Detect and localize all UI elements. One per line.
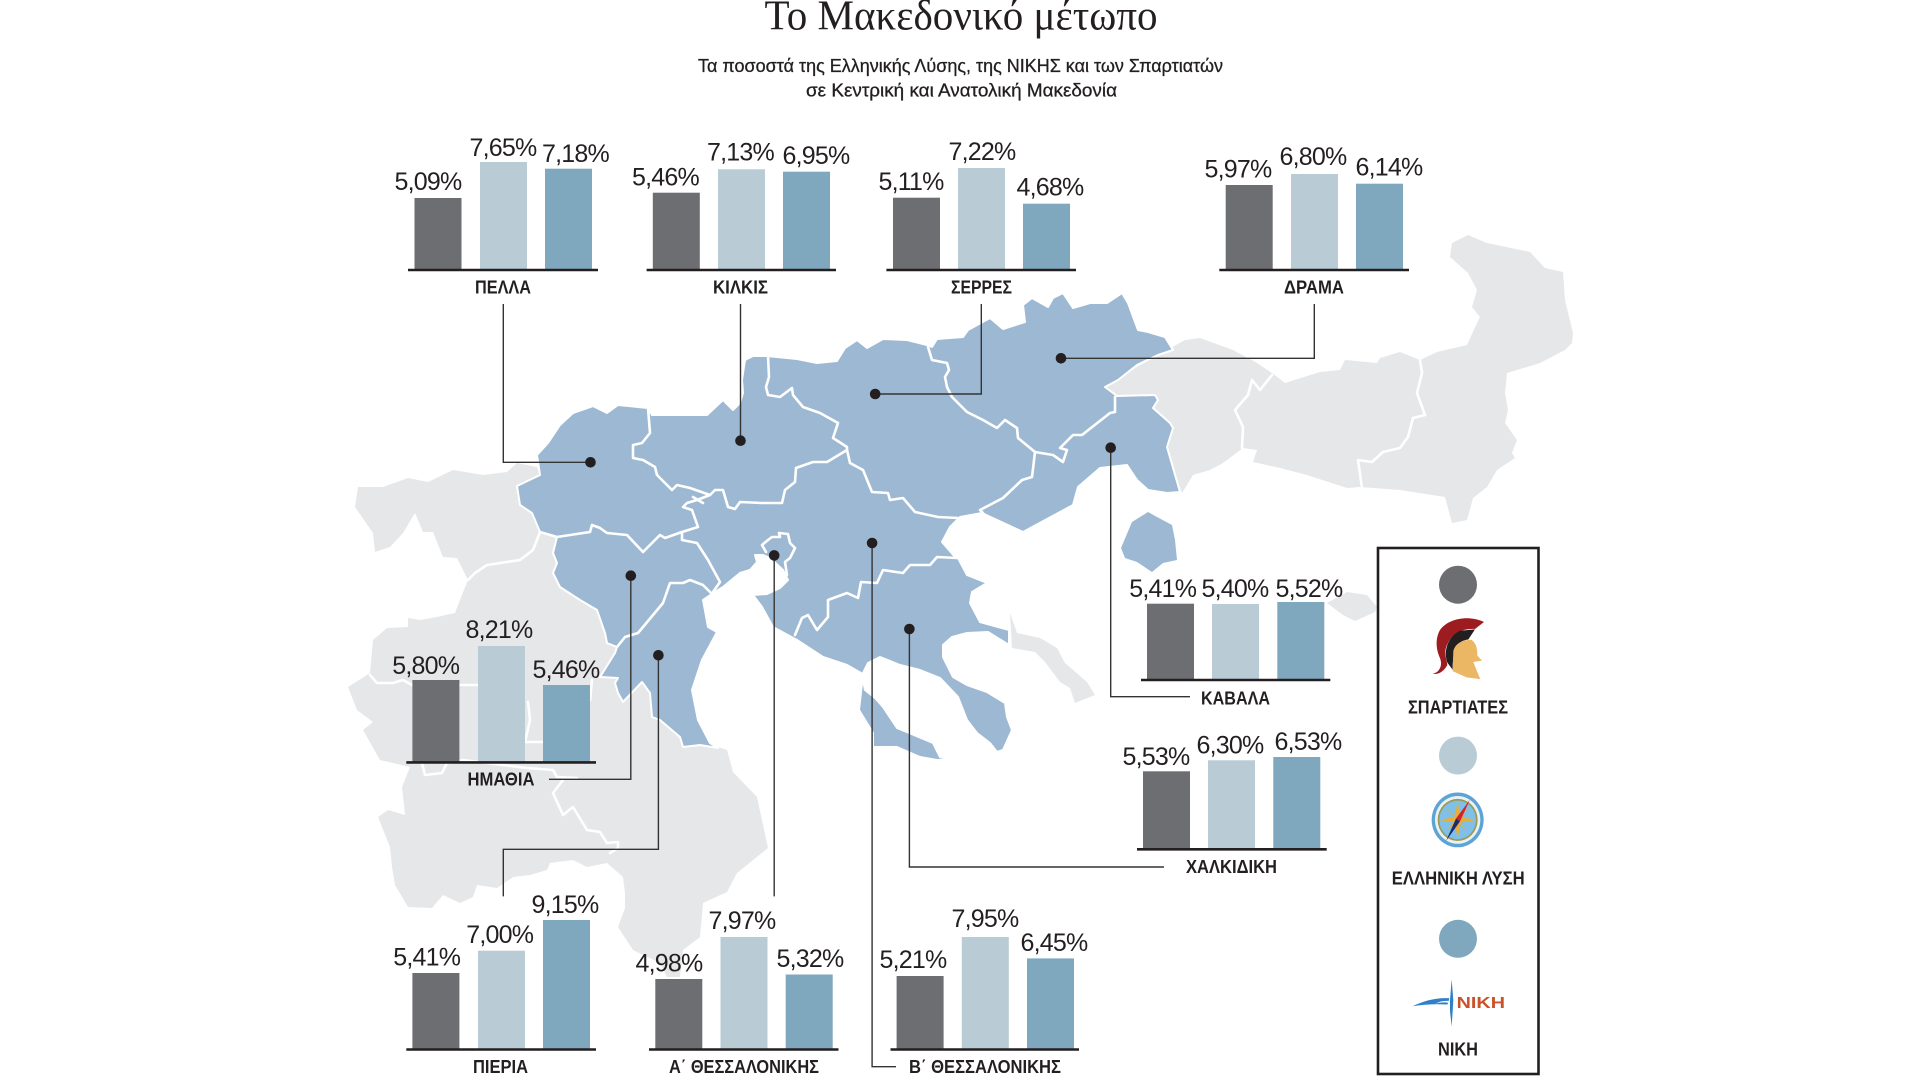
bar chart: Imathia: 5,46% (533, 656, 600, 684)
bar chart: Serres: 4,68% (1017, 174, 1084, 202)
icon: Niki logo (1413, 979, 1505, 1027)
bar chart: A Thessaloniki: Α΄ ΘΕΣΣΑΛΟΝΙΚΗΣ (669, 1057, 819, 1077)
bar chart: Kilkis: 7,13% (707, 138, 775, 166)
subtitle (698, 56, 1223, 100)
connector: Pella (503, 304, 596, 468)
legend swatch: Niki (1439, 920, 1477, 958)
map: regional unit borders (540, 347, 1115, 647)
subtitle: Τα ποσοστά της Ελληνικής Λύσης, της ΝΙΚΗΣ και των Σπαρτιατών (698, 56, 1223, 76)
bar chart: Drama (1205, 143, 1423, 298)
bar chart: Serres: 7,22% (949, 138, 1016, 166)
legend swatch: Spartans (1439, 566, 1477, 604)
bar chart: B Thessaloniki: 7,95% (952, 905, 1019, 933)
bar chart: Kilkis (632, 138, 850, 298)
bar chart: Kavala: 5,40% (1202, 575, 1269, 603)
legend (1378, 548, 1538, 1074)
bar chart: Kavala: 5,52% (1276, 575, 1343, 603)
bar chart: Drama: 6,14% (1356, 154, 1423, 182)
bar chart: Kavala (1129, 575, 1343, 708)
bar chart: Drama: 6,80% (1280, 143, 1347, 171)
bar chart: A Thessaloniki (636, 907, 844, 1077)
connector: Pieria (503, 650, 664, 896)
bar chart: Pieria: ΠΙΕΡΙΑ (473, 1057, 528, 1077)
icon: Spartan helmet (1433, 618, 1484, 679)
bar chart: A Thessaloniki: 4,98% (636, 950, 703, 978)
bar chart: Serres: ΣΕΡΡΕΣ (951, 278, 1012, 298)
bar chart: Pieria: 7,00% (466, 921, 534, 949)
connector: Kilkis (735, 304, 746, 446)
legend label: Spartans: ΣΠΑΡΤΙΑΤΕΣ (1408, 698, 1508, 718)
legend label: Niki: ΝΙΚΗ (1438, 1040, 1478, 1060)
connector: Imathia (549, 570, 636, 779)
bar chart: B Thessaloniki: Β΄ ΘΕΣΣΑΛΟΝΙΚΗΣ (909, 1057, 1061, 1077)
connector: Halkidiki (904, 624, 1164, 867)
bar chart: Pieria: 5,41% (393, 944, 461, 972)
bar chart: Pieria (393, 891, 599, 1077)
bar chart: Pella: ΠΕΛΛΑ (475, 278, 531, 298)
bar chart: Pieria: 9,15% (532, 891, 599, 919)
bar chart: Serres (878, 138, 1084, 298)
bar chart: Halkidiki: ΧΑΛΚΙΔΙΚΗ (1186, 857, 1277, 877)
bar chart: B Thessaloniki: 5,21% (880, 946, 947, 974)
connector: Serres (870, 304, 981, 399)
bar chart: Drama: 5,97% (1205, 156, 1272, 184)
bar chart: Halkidiki: 6,53% (1275, 728, 1342, 756)
map: neighbouring regions in grey (348, 235, 1573, 977)
bar chart: Kilkis: 5,46% (632, 164, 700, 192)
bar chart: Kavala: ΚΑΒΑΛΑ (1201, 688, 1270, 708)
bar chart: Imathia: 8,21% (466, 616, 533, 644)
bar chart: Pella: 5,09% (395, 168, 462, 196)
bar chart: Halkidiki: 6,30% (1197, 732, 1264, 760)
bar chart: B Thessaloniki (880, 905, 1088, 1077)
connector: B Thessaloniki (867, 538, 896, 1067)
subtitle: σε Κεντρική και Ανατολική Μακεδονία (806, 80, 1117, 100)
bar chart: Imathia (392, 616, 600, 790)
bar chart: B Thessaloniki: 6,45% (1021, 929, 1088, 957)
legend label: Elliniki Lysi: ΕΛΛΗΝΙΚΗ ΛΥΣΗ (1392, 868, 1525, 888)
bar chart: A Thessaloniki: 7,97% (709, 907, 776, 935)
bar chart: Pella: 7,18% (542, 140, 610, 168)
bar chart: Drama: ΔΡΑΜΑ (1284, 278, 1344, 298)
map: grey region borders (370, 360, 1425, 853)
icon: Niki logo: ΝΙΚΗ (1457, 995, 1505, 1012)
bar chart: Kilkis: 6,95% (783, 142, 850, 170)
connector: A Thessaloniki (769, 550, 780, 896)
bar chart: Halkidiki: 5,53% (1123, 743, 1190, 771)
icon: compass (1432, 793, 1484, 847)
bar chart: Kilkis: ΚΙΛΚΙΣ (713, 278, 768, 298)
connector: Drama (1056, 304, 1314, 364)
connector: Kavala (1105, 442, 1190, 697)
bar chart: Kavala: 5,41% (1129, 575, 1197, 603)
bar chart: Imathia: 5,80% (392, 652, 460, 680)
legend swatch: Elliniki Lysi (1439, 737, 1477, 775)
bar chart: Serres: 5,11% (878, 168, 944, 196)
bar chart: Imathia: ΗΜΑΘΙΑ (468, 770, 534, 790)
bar chart: Halkidiki (1123, 728, 1342, 877)
bar chart: A Thessaloniki: 5,32% (777, 945, 844, 973)
bar chart: Pella: 7,65% (470, 134, 537, 162)
bar chart: Pella (395, 134, 610, 298)
map: Central and East Macedonia in blue (517, 293, 1180, 760)
